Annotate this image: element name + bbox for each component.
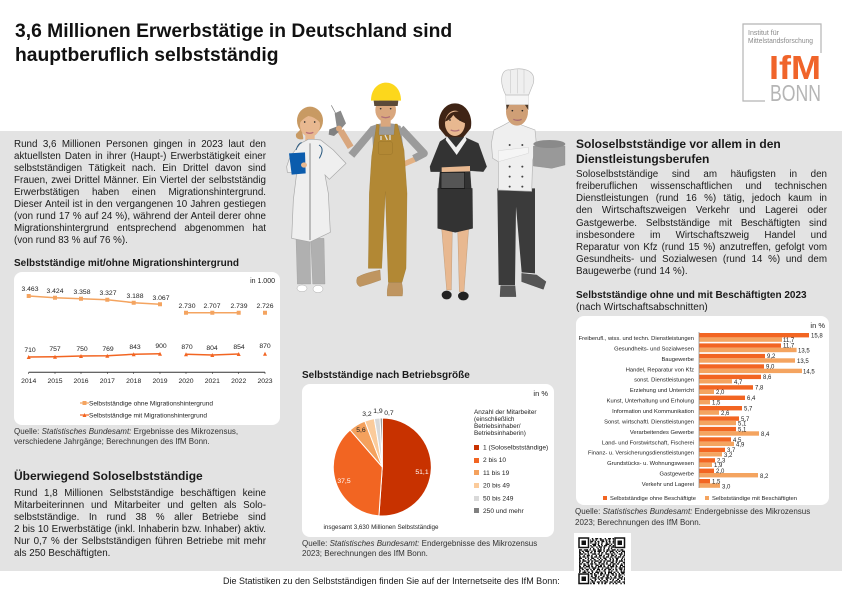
pie chart: Anzahl der Mitarbeiter [474,409,537,416]
panel: line chart [14,272,280,425]
pie chart: 1 (Soloselbstständige) [483,444,548,452]
text block: intro: selbstständigen Tätigkeit nach. Ein Drittel davon sind [14,163,266,174]
source: bar chart: Quelle: Statistisches Bundesamt: Endergebnisse des Mikrozensus [575,507,810,516]
bar chart: 3,2 [724,453,733,459]
text block: occupations: insbesondere im Wirtschaftszweig Handel und [576,230,827,240]
bar chart: Verkehr und Lagerei [642,482,694,488]
bar chart: 13,5 [797,359,809,365]
bar chart: 11,7 [783,338,795,344]
text block: occupations: Soloselbstständige sind am häufigsten in den [576,169,827,180]
text block: solo self-employed: 2 bis 10 Erwerbstätige (inkl. Inhaberin bzw. Inhaber) aktiv. [14,524,266,535]
line chart: 769 [102,346,114,353]
bar chart: Land- und Forstwirtschaft, Fischerei [602,440,694,446]
title: 3,6 Millionen Erwerbstätige in Deutschland sind [15,21,452,42]
bar chart: 2,0 [716,469,725,475]
heading: bar chart: (nach Wirtschaftsabschnitten) [576,302,708,313]
line chart: 870 [259,343,271,350]
bar chart: 8,6 [763,375,772,381]
line chart: 2.726 [256,303,274,310]
bar chart: 8,2 [760,474,769,480]
bar chart: 3,7 [727,448,736,454]
line chart: 900 [155,343,167,350]
pie chart: Betriebsinhaber/ [474,423,521,430]
source: bar chart [575,507,810,526]
source: line chart: Quelle: Statistisches Bundesamt: Ergebnisse des Mikrozensus, [14,427,238,436]
bar chart: 5,1 [738,428,747,434]
line chart: 2018 [126,378,141,385]
text block: solo self-employed [14,488,266,559]
line chart: 3.067 [152,295,170,302]
line chart: 843 [129,344,141,351]
text block: intro: Rund 3,6 Millionen Personen gingen in 2023 laut den [14,139,266,150]
bar chart: Verarbeitendes Gewerbe [630,430,694,436]
pie chart: 0,7 [384,410,394,417]
pie chart [324,389,548,531]
bar chart: 13,5 [798,348,810,354]
bar chart: 2,6 [721,411,730,417]
pie chart: 51,1 [415,469,429,476]
bar chart: Finanz- u. Versicherungsdienstleistungen [588,451,694,457]
bar chart: 4,9 [736,442,745,448]
source: bar chart: 2023; Berechnungen des IfM Bonn. [575,518,701,526]
line chart: 2015 [47,378,63,385]
footer note: Die Statistiken zu den Selbstständigen finden Sie auf der Internetseite des IfM Bonn: [223,576,560,586]
line chart: 710 [24,347,36,354]
bar chart: Gastgewerbe [660,472,694,478]
heading: occupations [576,137,781,166]
heading: solo self-employed: Überwiegend Soloselbstständige [14,469,203,483]
line chart: 3.424 [46,288,64,295]
pie chart: 250 und mehr [483,508,524,515]
title [15,21,452,66]
heading: occupations: Dienstleistungsberufen [576,152,709,166]
line chart: 2.739 [230,303,248,310]
bar chart: Selbstständige mit Beschäftigten [712,496,797,502]
QR code [574,533,631,584]
pie chart: (einschließlich [474,416,515,423]
bar chart: sonst. Dienstleistungen [634,378,694,384]
figure: doctor [287,107,346,293]
pie chart: 5,6 [356,427,366,434]
line chart: 2021 [205,378,220,385]
text block: intro: Frauen, zwei Drittel Männer. Ein Viertel der selbstständig [14,175,266,186]
panel: pie chart [302,384,554,537]
bar chart: 7,8 [755,386,764,392]
source: pie chart: Quelle: Statistisches Bundesamt: Endergebnisse des Mikrozensus [302,539,537,548]
pie chart: 50 bis 249 [483,496,514,502]
bar chart: 2,0 [716,390,725,396]
line chart: 2017 [100,378,115,385]
pie chart: insgesamt 3,630 Millionen Selbstständige [324,524,439,531]
bar chart: 1,5 [712,480,721,486]
bar chart: 15,8 [811,334,823,340]
pie chart: 20 bis 49 [483,482,510,490]
bar chart: 5,7 [744,406,753,412]
source: pie chart [302,539,537,558]
line chart: 2023 [257,378,273,385]
bar chart: 4,7 [734,380,743,386]
text block: occupations: freiberuflichen wissenschaftlichen und technischen [576,181,827,192]
text block: occupations [576,169,827,277]
bar chart: 8,4 [761,432,770,438]
line chart: 2019 [152,378,168,385]
grey background band [0,131,842,571]
bar chart: 1,5 [712,400,721,406]
line chart: 854 [233,344,245,351]
bar chart: 6,4 [747,396,756,402]
text block: occupations: Baugewerbe (rund 14 %). [576,266,688,277]
line chart: 3.358 [73,289,91,296]
bar chart: 9,2 [767,354,776,360]
line chart: 804 [206,345,218,352]
line chart: 2014 [21,378,36,385]
bar chart: Grundstücks- u. Wohnungswesen [607,461,694,467]
bar chart: Kunst, Unterhaltung und Erholung [607,399,694,405]
text block: occupations: den Wirtschaftszweigen Verkehr und Lagerei oder [576,205,827,216]
illustration: four professions [286,68,566,300]
pie chart: Betriebsinhaberin) [474,430,526,437]
source: line chart: verschiedene Jahrgänge; Berechnungen des IfM Bonn. [14,437,210,446]
logo: IfM Bonn: IfM [769,50,821,87]
pie chart: 2 bis 10 [483,457,506,464]
heading: occupations: Soloselbstständige vor allem in den [576,137,781,151]
bar chart: Freiberufl., wiss. und techn. Dienstleistungen [579,336,694,342]
line chart: 2016 [73,378,89,385]
text block: solo self-employed: Rund 1,8 Millionen Selbstständige beschäftigen keine [14,488,266,499]
text block: solo self-employed: als 250 Beschäftigten. [14,548,110,559]
text block: solo self-employed: selbstständige. In rund 38 % aller Betriebe sind [14,512,266,523]
bar chart: Gesundheits- und Sozialwesen [614,346,694,352]
panel: bar chart [576,316,829,505]
line chart: 757 [49,346,61,353]
bar chart: 1,9 [714,463,723,469]
line chart: 750 [76,346,88,353]
text block: occupations: Reparatur von Kfz (rund 15 %) anzutreffen, gefolgt vom [576,242,827,252]
title: hauptberuflich selbstständig [15,45,279,66]
text block: intro: Migrationshintergrund entsprechend abgenommen hat [14,223,266,234]
source: line chart [14,427,238,446]
line chart: 2.707 [203,303,221,310]
heading: bar chart: Selbstständige ohne und mit Beschäftigten 2023 [576,290,807,301]
bar chart: 14,5 [803,370,815,376]
pie chart: 37,5 [337,478,351,485]
source: pie chart: 2023; Berechnungen des IfM Bonn. [302,549,428,558]
bar chart: 5,7 [741,417,750,423]
pie chart: 1,9 [373,408,383,415]
text block: intro: Erwerbstätigen haben einen Migrationshintergrund. [14,187,266,198]
line chart: 2020 [178,378,194,385]
text block: solo self-employed: Mitarbeiterinnen und Mitarbeiter und gelten als Solo- [14,500,266,511]
line chart: Selbstständige ohne Migrationshintergrund [89,400,213,407]
line chart: 3.188 [126,293,144,300]
text block: occupations: Gesundheits- und Sozialwesen (rund 14 %) und dem [576,254,827,265]
line chart: 2022 [231,378,246,385]
text block: intro [14,139,266,246]
bar chart: Sonst. wirtschaftl. Dienstleistungen [604,419,694,425]
bar chart: 5,1 [738,422,747,428]
logo: IfM Bonn: BONN [770,80,821,106]
figure: businesswoman [430,103,487,300]
bar chart: 4,5 [733,438,742,444]
bar chart: Baugewerbe [661,357,694,363]
logo: IfM Bonn [742,23,822,106]
heading: bar chart [576,290,807,313]
line chart: 3.463 [21,286,39,293]
text block: intro: (von rund 17 % auf 24 %), während der Anteil derer ohne [14,211,266,222]
figure: chef [491,69,565,297]
logo: IfM Bonn: Mittelstandsforschung [748,36,813,45]
line chart: in 1.000 [250,278,275,285]
pie chart: 3,2 [362,411,372,418]
line chart: Selbstständige mit Migrationshintergrund [89,412,207,419]
line chart: 3.327 [99,290,117,297]
bar chart: Selbstständige ohne Beschäftigte [610,496,696,502]
bar chart: Information und Kommunikation [612,409,694,415]
logo: IfM Bonn: Institut für [748,28,780,37]
pie chart: in % [533,389,548,398]
text block: occupations: Gastgewerbe. Selbstständige mit Beschäftigten sind [576,218,827,228]
heading: pie chart: Selbstständige nach Betriebsgröße [302,370,470,381]
line chart: 2.730 [178,303,196,310]
pie chart: 11 bis 19 [483,470,510,477]
bar chart: 11,7 [783,344,795,350]
bar chart [579,321,825,502]
bar chart: in % [810,321,825,330]
text block: occupations: Dienstleistungen (rund 16 %) tätig, jedoch kaum in [576,193,827,204]
text block: intro: (von rund 83 % auf 76 %). [14,235,128,246]
text block: solo self-employed: Nur 0,7 % der Selbstständigen führen Betriebe mit mehr [14,536,266,547]
text block: intro: aktuellsten Daten in ihrer (Haupt-) Erwerbstätigkeit einer [14,151,266,162]
figure: craftsman [329,83,424,296]
bar chart: 2,3 [717,458,726,464]
line chart [21,278,275,419]
line chart: 870 [181,344,193,351]
heading: line chart: Selbstständige mit/ohne Migrationshintergrund [14,258,239,269]
bar chart: 3,0 [722,484,731,490]
bar chart: Handel, Reparatur von Kfz [626,367,694,373]
bar chart: Erziehung und Unterricht [630,388,694,394]
text block: intro: Dieser Anteil ist in den vergangenen 10 Jahren gestiegen [14,199,266,210]
bar chart: 9,0 [766,364,775,370]
